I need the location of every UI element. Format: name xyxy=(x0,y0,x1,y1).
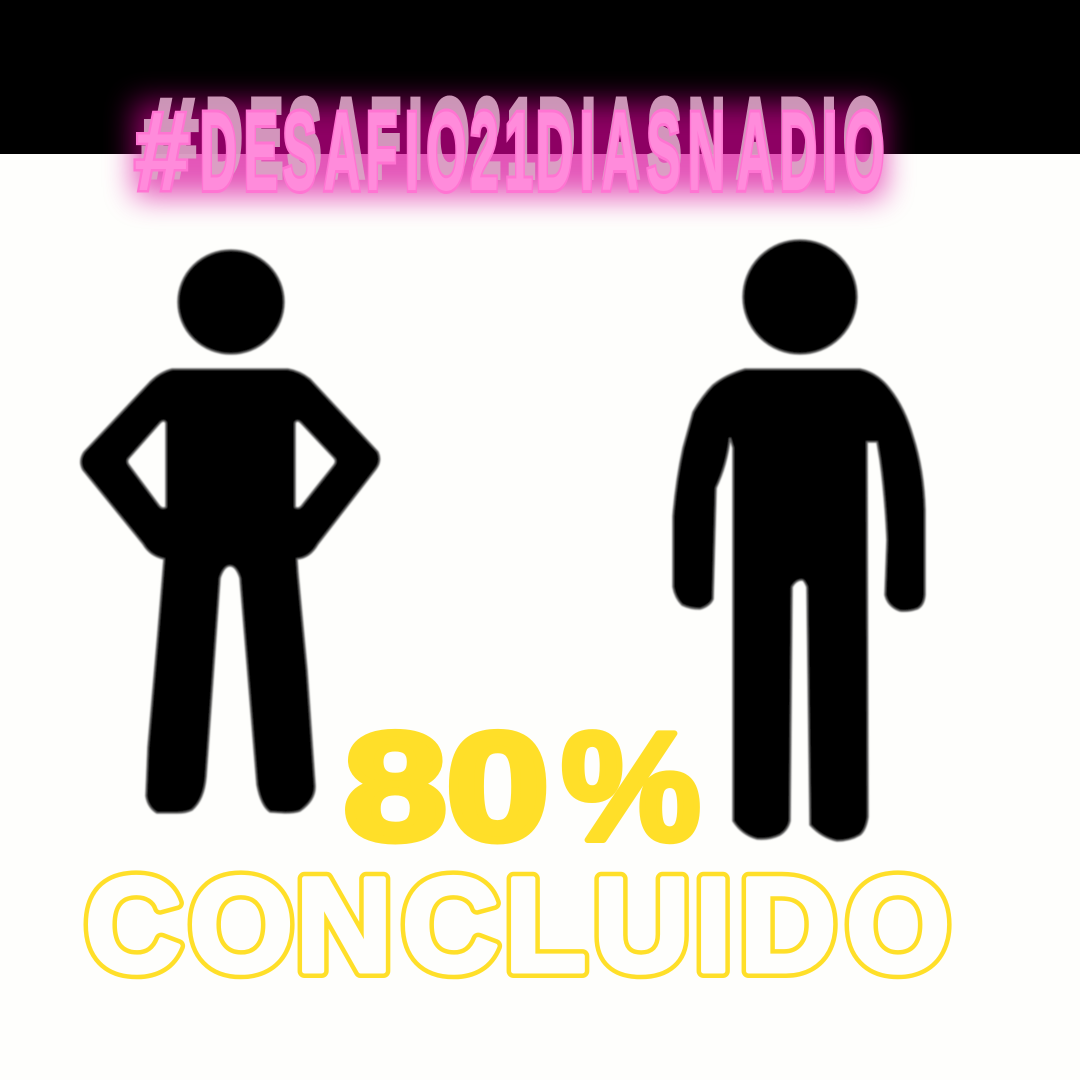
figure: 80%: 80 xyxy=(344,702,549,872)
label: CONCLUIDO outlined: CONCLUIDO xyxy=(85,851,950,1000)
icon: standing figure with arms down xyxy=(673,240,925,841)
figure: 80% xyxy=(344,700,701,873)
title: #DESAFIO21DIASNADIO neon: # xyxy=(134,89,190,214)
title: #DESAFIO21DIASNADIO neon: DESAFIO21DIASNADIO xyxy=(200,90,884,214)
title: #DESAFIO21DIASNADIO neon: # xyxy=(142,76,198,201)
icon: standing figure with hands on hips xyxy=(81,250,380,813)
black top band xyxy=(0,0,1080,154)
figure: 80%: % xyxy=(561,700,701,873)
title: #DESAFIO21DIASNADIO neon: DESAFIO21DIASNADIO xyxy=(206,77,883,201)
label: CONCLUIDO outlined: CONCLUIDO xyxy=(85,851,950,1000)
